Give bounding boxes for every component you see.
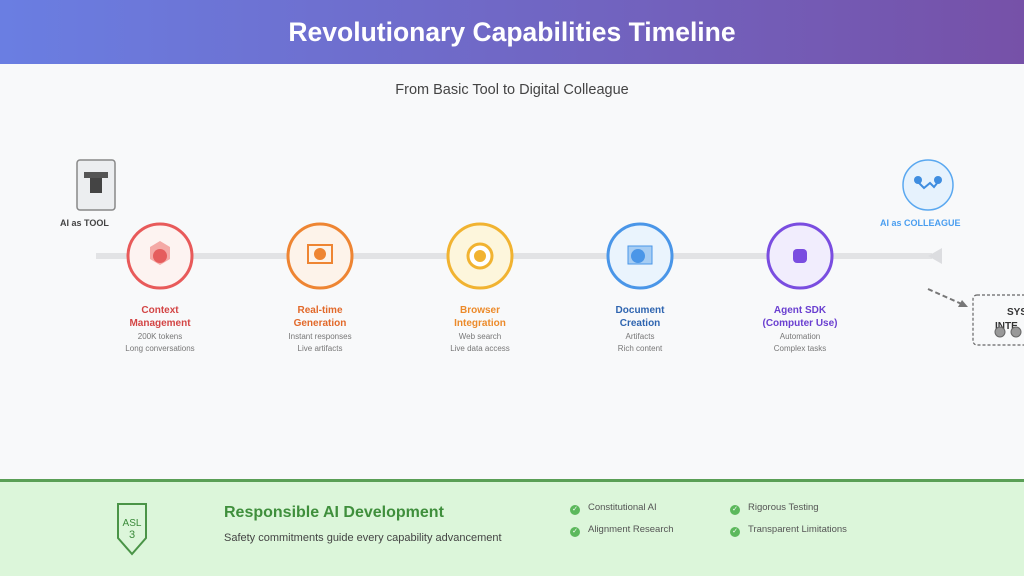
text: agent: (Computer Use) [762, 318, 838, 329]
text: realtime: Live artifacts [298, 344, 342, 353]
icon: ASL shield [117, 503, 147, 556]
text: agent [762, 305, 838, 353]
label: AI as colleague: AI as COLLEAGUE [880, 218, 961, 228]
box: system integration: INTE [995, 321, 1018, 332]
text: document: Document [616, 305, 664, 316]
text: browser: Browser [460, 305, 500, 316]
node: document [608, 224, 672, 288]
text: context: Context [141, 305, 179, 316]
subtitle: From Basic Tool to Digital Colleague [395, 82, 629, 98]
node: context [128, 224, 192, 288]
text: agent: Agent SDK [774, 305, 826, 316]
text: realtime: Real-time [297, 305, 342, 316]
footer panel [0, 479, 1024, 576]
icon: tool [77, 160, 115, 210]
box: system integration [973, 295, 1024, 345]
checklist: ✓ [732, 528, 738, 535]
text: document: Artifacts [626, 332, 654, 341]
checklist: Transparent Limitations [748, 524, 847, 535]
icon: ASL shield: ASL [123, 518, 142, 529]
header [0, 0, 1024, 64]
text: browser: Live data access [450, 344, 510, 353]
node: realtime [288, 224, 352, 288]
checklist: ✓ [572, 528, 578, 535]
checklist: Constitutional AI [588, 502, 657, 513]
header: Revolutionary Capabilities Timeline [288, 17, 736, 47]
text: context [125, 305, 195, 353]
text: browser: Integration [454, 318, 506, 329]
checklist: ✓ [732, 506, 738, 513]
text: realtime: Generation [294, 318, 346, 329]
text: realtime [288, 305, 352, 353]
label: AI as tool: AI as TOOL [60, 218, 109, 228]
checklist: ✓ [572, 506, 578, 513]
text: agent: Complex tasks [774, 344, 826, 353]
text: browser [450, 305, 510, 353]
node: browser [448, 224, 512, 288]
arrow: dashed [928, 289, 968, 307]
checklist [570, 502, 847, 537]
text: realtime: Instant responses [288, 332, 352, 341]
text: context: Long conversations [125, 344, 195, 353]
icon: ASL shield: 3 [129, 529, 135, 541]
text: context: 200K tokens [138, 332, 182, 341]
text: document: Rich content [618, 344, 662, 353]
checklist: Alignment Research [588, 524, 674, 535]
text: context: Management [129, 318, 191, 329]
icon: colleague [903, 160, 953, 210]
text: agent: Automation [780, 332, 820, 341]
checklist: Rigorous Testing [748, 502, 819, 513]
text: browser: Web search [459, 332, 501, 341]
text: document: Creation [620, 318, 660, 329]
text: document [616, 305, 664, 353]
footer text: Safety commitments guide every capability advancement [224, 532, 502, 544]
node: agent [768, 224, 832, 288]
footer heading: Responsible AI Development [224, 504, 444, 521]
timeline line [96, 248, 942, 264]
